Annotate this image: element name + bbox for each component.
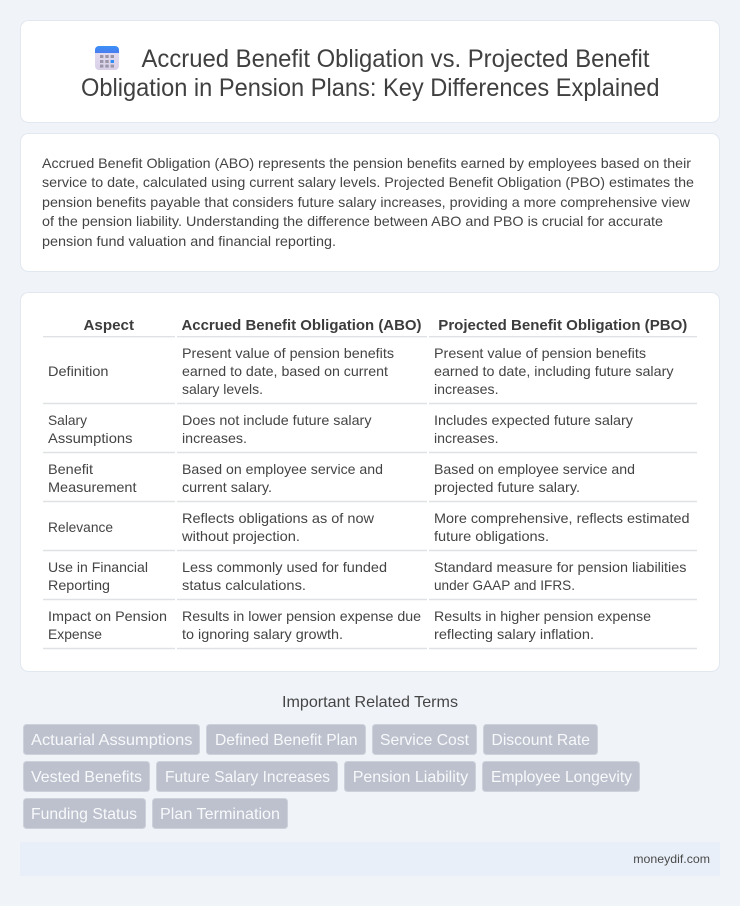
table header: Aspect bbox=[84, 317, 134, 334]
row: Use in Financial Reporting: Reporting bbox=[48, 577, 110, 593]
tags: related terms: Employee Longevity bbox=[491, 769, 632, 786]
row: Definition: Present value of pension benefits bbox=[434, 345, 646, 361]
footer: moneydif.com bbox=[633, 852, 710, 866]
tags: related terms: Vested Benefits bbox=[31, 769, 142, 786]
row: Impact on Pension Expense: to ignoring salary growth. bbox=[182, 626, 343, 642]
row: Relevance bbox=[43, 510, 697, 550]
row: Definition: salary levels. bbox=[182, 381, 263, 397]
tags: related terms bbox=[24, 724, 640, 828]
panel: comparison table bbox=[20, 292, 720, 672]
tags: related terms: Plan Termination bbox=[160, 806, 280, 823]
row: Impact on Pension Expense: reflecting salary inflation. bbox=[434, 626, 594, 642]
row: Definition: earned to date, based on current bbox=[182, 363, 388, 379]
row: Definition: earned to date, including future salary bbox=[434, 363, 674, 379]
tags: related terms: Pension Liability bbox=[353, 769, 468, 786]
row: Salary Assumptions: Assumptions bbox=[48, 430, 132, 446]
row: Relevance: future obligations. bbox=[434, 528, 549, 544]
row: Relevance: Relevance bbox=[48, 519, 113, 535]
tags: related terms: Actuarial Assumptions bbox=[31, 732, 192, 749]
row: Salary Assumptions bbox=[43, 412, 697, 452]
tags: related terms: Future Salary Increases bbox=[165, 769, 330, 786]
table header: Projected Benefit Obligation (PBO) bbox=[438, 317, 687, 334]
row: Impact on Pension Expense bbox=[43, 608, 697, 648]
row: Definition: increases. bbox=[434, 381, 498, 397]
row: Benefit Measurement: Measurement bbox=[48, 479, 137, 495]
text block: intro: of the pension liability. Understanding the difference between ABO and PBO is crucial for accurate bbox=[42, 213, 663, 229]
tags: related terms: Funding Status bbox=[31, 806, 137, 823]
row: Use in Financial Reporting: Less commonly used for funded bbox=[182, 559, 387, 575]
row: Relevance: More comprehensive, reflects estimated bbox=[434, 510, 690, 526]
row: Benefit Measurement: Based on employee service and bbox=[434, 461, 635, 477]
tags: related terms: Service Cost bbox=[380, 732, 470, 749]
row: Use in Financial Reporting: under GAAP and IFRS. bbox=[434, 577, 575, 593]
row: Benefit Measurement: Based on employee service and bbox=[182, 461, 383, 477]
row: Definition bbox=[43, 345, 697, 404]
text block: intro: pension benefits payable that considers future salary increases, providing a more comprehensive view bbox=[42, 194, 691, 210]
row: Definition: Present value of pension benefits bbox=[182, 345, 394, 361]
tags: related terms: Discount Rate bbox=[492, 732, 590, 749]
table header: Accrued Benefit Obligation (ABO) bbox=[182, 317, 422, 334]
tags: related terms: Defined Benefit Plan bbox=[215, 732, 358, 749]
row: Salary Assumptions: increases. bbox=[182, 430, 247, 446]
row: Use in Financial Reporting bbox=[43, 559, 697, 600]
text block: intro: service to date, calculated using current salary levels. Projected Benefit Obligation (PBO) estimates the bbox=[42, 174, 694, 190]
title: Obligation in Pension Plans: Key Differences Explained bbox=[81, 74, 660, 102]
row: Impact on Pension Expense: Results in lower pension expense due bbox=[182, 608, 421, 624]
row: Salary Assumptions: Does not include future salary bbox=[182, 412, 372, 428]
row: Benefit Measurement: Benefit bbox=[48, 461, 93, 477]
panel: title card bbox=[20, 20, 720, 122]
row: Benefit Measurement: projected future salary. bbox=[434, 479, 580, 495]
row: Use in Financial Reporting: Use in Financial bbox=[48, 559, 148, 575]
row: Use in Financial Reporting: status calculations. bbox=[182, 577, 306, 593]
row: Salary Assumptions: increases. bbox=[434, 430, 498, 446]
text block: intro: Accrued Benefit Obligation (ABO) represents the pension benefits earned by employees based on their bbox=[42, 155, 691, 171]
heading: related terms: Important Related Terms bbox=[282, 694, 458, 711]
table header bbox=[43, 317, 697, 337]
footer bbox=[20, 842, 720, 876]
text block: intro: pension fund valuation and financial reporting. bbox=[42, 233, 336, 249]
row: Salary Assumptions: Includes expected future salary bbox=[434, 412, 633, 428]
row: Use in Financial Reporting: Standard measure for pension liabilities bbox=[434, 559, 686, 575]
row: Benefit Measurement: current salary. bbox=[182, 479, 272, 495]
row: Salary Assumptions: Salary bbox=[48, 412, 87, 428]
panel: intro paragraph bbox=[20, 134, 720, 272]
row: Relevance: Reflects obligations as of now bbox=[182, 510, 375, 526]
icon: calendar bbox=[95, 46, 119, 70]
row: Definition: Definition bbox=[48, 363, 108, 379]
row: Relevance: without projection. bbox=[181, 528, 300, 544]
title bbox=[81, 45, 660, 102]
text block: intro bbox=[42, 155, 694, 249]
row: Benefit Measurement bbox=[43, 461, 697, 502]
row: Impact on Pension Expense: Impact on Pension bbox=[48, 608, 167, 624]
title: Accrued Benefit Obligation vs. Projected Benefit bbox=[142, 45, 650, 73]
row: Impact on Pension Expense: Expense bbox=[48, 626, 102, 642]
row: Impact on Pension Expense: Results in higher pension expense bbox=[434, 608, 651, 624]
